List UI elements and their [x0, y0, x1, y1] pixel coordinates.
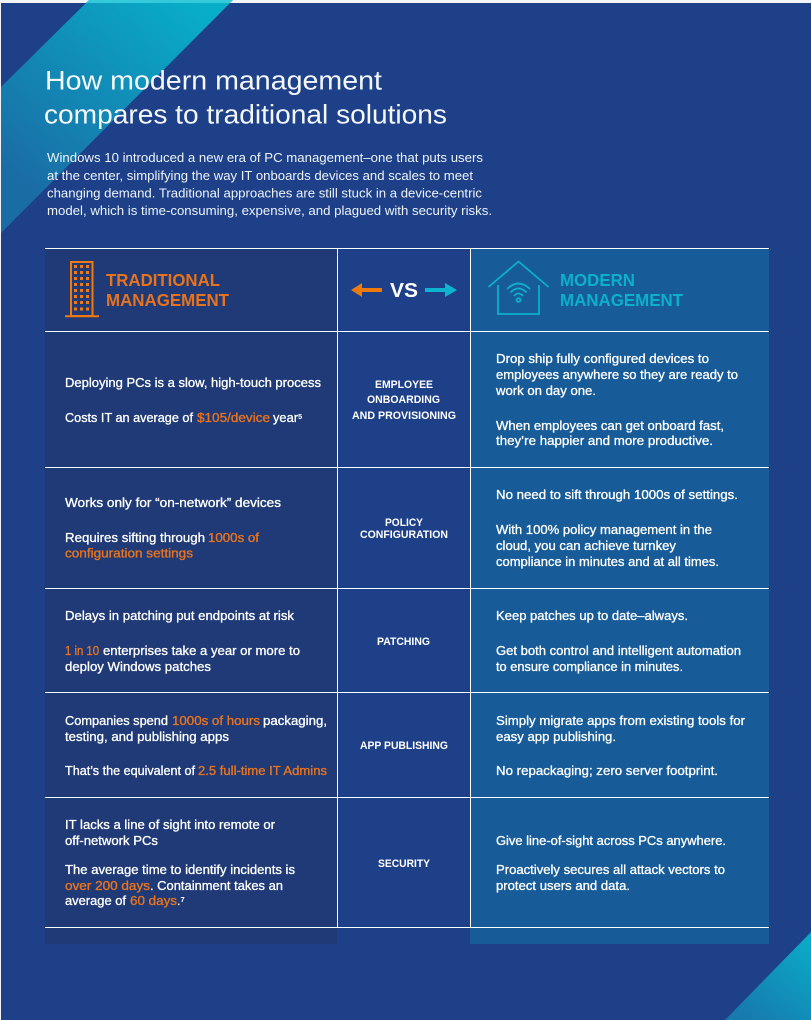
vs label: VS	[390, 280, 418, 302]
row: policy configuration, modern text: cloud, you can achieve turnkey	[496, 539, 677, 553]
row: employee onboarding, modern text: Drop ship fully configured devices to	[496, 352, 709, 366]
row: policy configuration, modern text: compliance in minutes and at all times.	[496, 555, 719, 569]
row: security, modern text	[496, 834, 726, 893]
row: security, modern text: protect users and data.	[496, 879, 630, 893]
row: app publishing, modern text: No repackaging; zero server footprint.	[496, 764, 718, 778]
row label: employee onboarding and provisioning: EMPLOYEE	[375, 379, 433, 391]
row: policy configuration, traditional text: configuration settings	[65, 546, 193, 560]
row: patching, modern text: Keep patches up to date–always.	[496, 609, 688, 623]
row: security, traditional text: .	[177, 894, 180, 908]
row: app publishing, traditional text: Companies spend	[65, 714, 168, 728]
row: patching, traditional text: Delays in patching put endpoints at risk	[65, 609, 295, 623]
row: app publishing, modern text	[496, 714, 745, 778]
heading: modern management: MODERN	[560, 270, 635, 290]
icon: house with wifi	[488, 262, 548, 314]
row: patching, modern text: to ensure compliance in minutes.	[496, 660, 683, 674]
row: app publishing, modern text: Simply migrate apps from existing tools for	[496, 714, 745, 728]
row: employee onboarding, traditional text: Costs IT an average of	[65, 411, 194, 425]
title: compares to traditional solutions	[44, 100, 447, 130]
icon: orange left arrow	[351, 283, 382, 297]
top-left diagonal band	[1, 0, 233, 233]
heading: traditional management: MANAGEMENT	[106, 290, 229, 310]
row: policy configuration, traditional text: Requires sifting through	[65, 531, 205, 545]
row: employee onboarding, modern text: they’re happier and more productive.	[496, 434, 713, 448]
row: security, traditional text: The average time to identify incidents is	[65, 863, 295, 877]
row: policy configuration, traditional text: Works only for “on-network” devices	[65, 496, 281, 510]
row label: patching: PATCHING	[377, 636, 430, 648]
row: policy configuration, traditional text	[65, 496, 281, 560]
row: employee onboarding, traditional text	[65, 376, 321, 425]
intro text: Windows 10 introduced a new era of PC management–one that puts users	[47, 151, 483, 165]
row label: employee onboarding and provisioning: AND PROVISIONING	[352, 410, 456, 422]
intro text: model, which is time-consuming, expensive, and plagued with security risks.	[47, 204, 492, 218]
row: patching, modern text	[496, 609, 741, 674]
intro text: at the center, simplifying the way IT onboards devices and scales to meet	[47, 169, 474, 183]
row: security, traditional text: average of	[65, 894, 127, 908]
row: patching, traditional text: 1 in 10	[65, 644, 99, 658]
row label: policy configuration	[360, 517, 448, 541]
row label: security: SECURITY	[378, 858, 431, 870]
row: security, traditional text: . Containment takes an	[150, 879, 283, 893]
row: employee onboarding, modern text: employees anywhere so they are ready to	[496, 368, 738, 382]
row label: policy configuration: POLICY	[385, 517, 424, 529]
row: policy configuration, modern text: No need to sift through 1000s of settings.	[496, 488, 738, 502]
bottom-right triangle	[725, 932, 811, 1020]
heading: traditional management	[106, 270, 229, 310]
heading: modern management	[560, 270, 683, 310]
intro text: changing demand. Traditional approaches are still stuck in a device-centric	[47, 186, 482, 200]
row: app publishing, traditional text: 2.5 full-time IT Admins	[198, 764, 327, 778]
row: patching, modern text: Get both control and intelligent automation	[496, 644, 741, 658]
row label: employee onboarding and provisioning	[352, 379, 456, 422]
panel: modern column background	[470, 248, 769, 944]
row: app publishing, traditional text: packaging,	[263, 714, 327, 728]
row: app publishing, traditional text: testing, and publishing apps	[65, 730, 229, 744]
row: patching, traditional text: deploy Windows patches	[65, 660, 211, 674]
row label: policy configuration: CONFIGURATION	[360, 529, 448, 541]
row: app publishing, traditional text	[65, 714, 327, 778]
row: security, traditional text	[65, 818, 295, 908]
row: security, traditional text: off-network PCs	[65, 834, 158, 848]
row: employee onboarding, modern text	[495, 352, 738, 448]
panel: traditional column background	[45, 248, 337, 944]
title	[44, 66, 447, 130]
row: app publishing, modern text: easy app publishing.	[496, 730, 616, 744]
row: app publishing, traditional text: 1000s of hours	[172, 714, 260, 728]
row: security, modern text: Give line-of-sight across PCs anywhere.	[496, 834, 726, 848]
row: employee onboarding, traditional text: Deploying PCs is a slow, high-touch process	[65, 376, 321, 390]
row: employee onboarding, modern text: When employees can get onboard fast,	[496, 419, 724, 433]
row: policy configuration, traditional text: 1000s of	[208, 531, 260, 545]
row: security, traditional text: over 200 days	[65, 879, 150, 893]
row: employee onboarding, traditional text: year	[273, 411, 298, 425]
row: security, traditional text: 7	[180, 895, 185, 904]
row: app publishing, traditional text: That’s the equivalent of	[65, 764, 196, 778]
row: security, traditional text: 60 days	[130, 894, 177, 908]
intro text	[47, 151, 492, 218]
row: employee onboarding, traditional text: $105/device	[197, 411, 270, 425]
heading: traditional management: TRADITIONAL	[106, 270, 220, 290]
row: patching, traditional text	[65, 609, 300, 674]
row: security, modern text: Proactively secures all attack vectors to	[496, 863, 725, 877]
row label: employee onboarding and provisioning: ONBOARDING	[367, 394, 440, 406]
row: security, traditional text: IT lacks a line of sight into remote or	[65, 818, 275, 832]
icon: office building	[65, 262, 99, 316]
row label: app publishing: APP PUBLISHING	[360, 740, 448, 752]
row: employee onboarding, traditional text: 5	[298, 412, 302, 421]
row: patching, traditional text: enterprises take a year or more to	[103, 644, 300, 658]
row: policy configuration, modern text	[496, 488, 738, 569]
row: policy configuration, modern text: With 100% policy management in the	[496, 523, 712, 537]
heading: modern management: MANAGEMENT	[560, 290, 683, 310]
title: How modern management	[45, 66, 383, 96]
row: employee onboarding, modern text: work on day one.	[495, 384, 596, 398]
icon: cyan right arrow	[425, 283, 457, 297]
